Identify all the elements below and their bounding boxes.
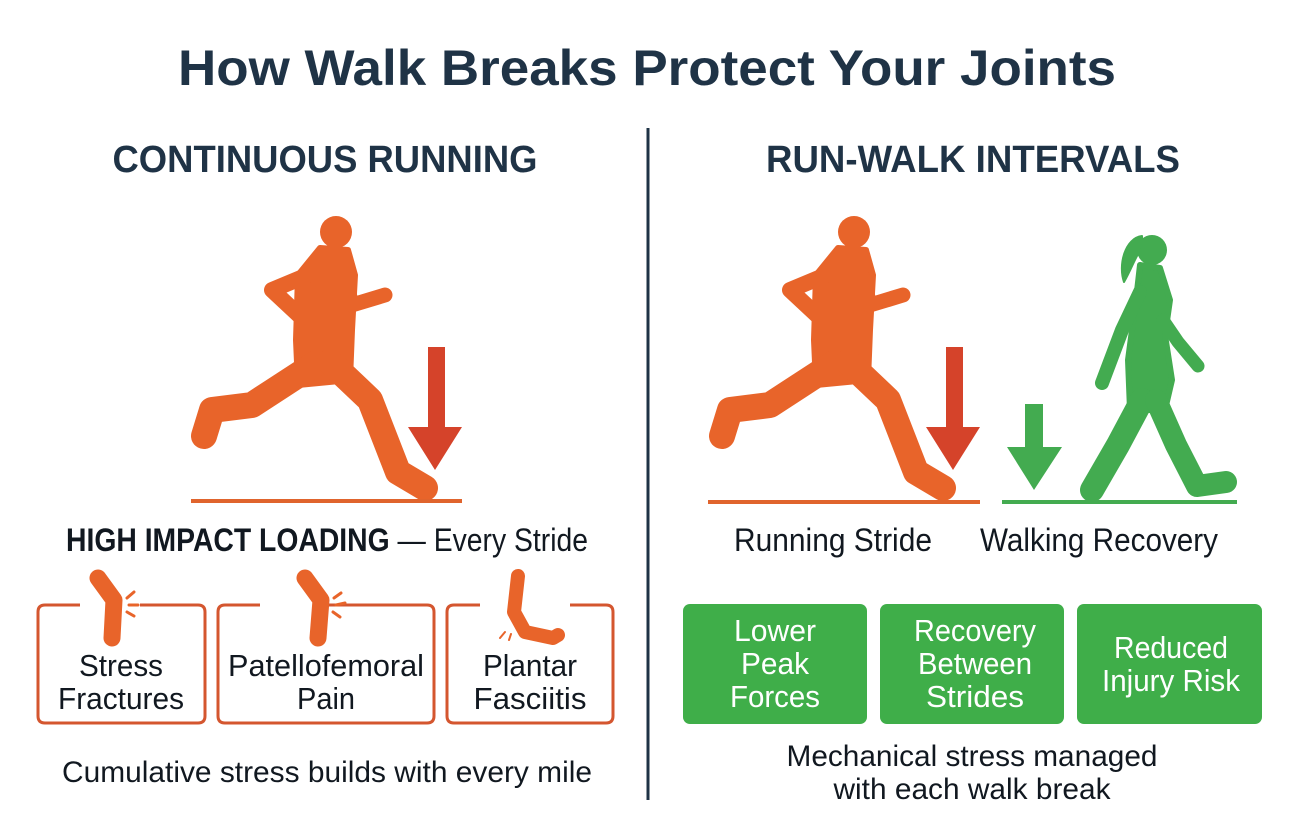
ground line right run — [708, 500, 980, 504]
heading: continuous running: CONTINUOUS RUNNING — [112, 139, 538, 181]
text: box labels left: Patellofemoral — [228, 648, 424, 683]
panel: benefit boxes — [683, 604, 1262, 724]
text: box labels left: Stress — [79, 648, 163, 683]
arrow: reduced impact — [1007, 404, 1062, 490]
text: benefit labels: Injury Risk — [1102, 663, 1240, 698]
text: benefit labels: Reduced — [1114, 630, 1228, 665]
label: walking recovery: Walking Recovery — [980, 522, 1218, 558]
arrow: impact left — [408, 347, 462, 470]
heading: run-walk intervals: RUN-WALK INTERVALS — [766, 139, 1180, 181]
icon: foot — [500, 576, 558, 640]
text: benefit labels: Between — [918, 646, 1032, 681]
ground line left — [191, 499, 462, 503]
text: box labels left: Plantar — [483, 648, 577, 683]
text: benefit labels: Peak — [741, 646, 809, 681]
text: box labels left: Pain — [297, 681, 355, 716]
text: box labels left: Fasciitis — [474, 681, 586, 716]
icon: walker — [1092, 235, 1226, 490]
text: mechanical stress: with each walk break — [833, 773, 1111, 806]
icon: runner right — [722, 216, 943, 488]
title: How Walk Breaks Protect Your Joints — [178, 40, 1116, 96]
label: running stride: Running Stride — [734, 522, 932, 558]
icon: runner left — [204, 216, 425, 488]
text: benefit labels: Recovery — [914, 613, 1036, 648]
label: high impact: HIGH IMPACT LOADING — Every Stride — [66, 522, 588, 558]
arrow: impact right — [926, 347, 980, 470]
icon: knee 1 — [98, 578, 138, 638]
text: benefit labels: Lower — [734, 613, 816, 648]
text: mechanical stress: Mechanical stress managed — [786, 740, 1158, 773]
text: benefit labels: Forces — [730, 679, 820, 714]
ground line walk — [1002, 500, 1237, 504]
text: box labels left: Fractures — [58, 681, 184, 716]
panel: injury boxes — [38, 605, 613, 723]
icon: knee 2 — [305, 578, 345, 638]
text: box labels left — [58, 648, 586, 716]
text: benefit labels — [730, 613, 1240, 714]
text: cumulative stress: Cumulative stress builds with every mile — [62, 756, 592, 789]
text: mechanical stress — [786, 740, 1158, 806]
text: benefit labels: Strides — [926, 679, 1024, 714]
